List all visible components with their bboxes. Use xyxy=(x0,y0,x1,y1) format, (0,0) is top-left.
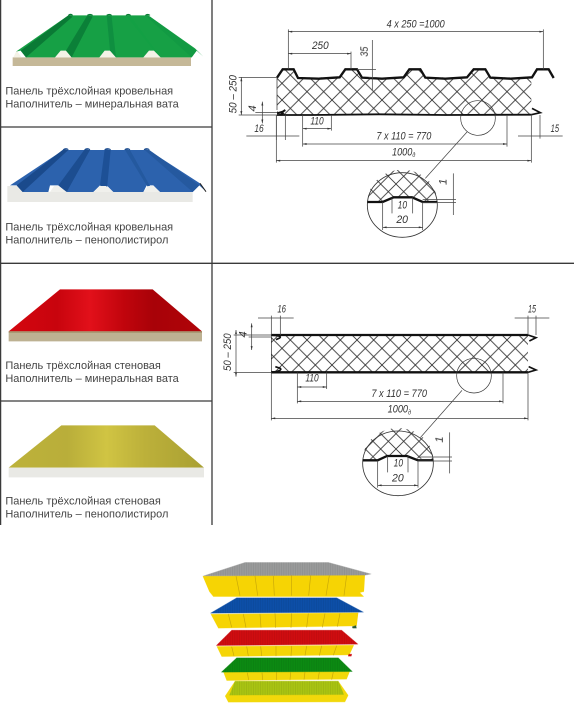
caption: red panel: Панель трёхслойная стеновая xyxy=(5,360,161,372)
stacked panel: lime xyxy=(225,681,348,702)
dimension: 1000 xyxy=(276,115,531,163)
image: blue roof panel xyxy=(7,149,206,202)
dimension: thickness 50-250 xyxy=(227,74,277,115)
stacked panel: red xyxy=(216,630,358,657)
dimension: pitch 250 xyxy=(288,40,351,69)
dimension: 110 xyxy=(303,115,331,147)
dimension: 110 xyxy=(297,372,327,403)
detail magnified view: 20 xyxy=(395,214,409,226)
stacked panel: grey top xyxy=(203,562,372,680)
detail callout circle xyxy=(420,358,491,438)
detail magnified view: 10 xyxy=(394,457,404,469)
dimension: overall 4 x 250: 4 x 250 =1000 xyxy=(387,18,445,30)
detail magnified view xyxy=(367,170,456,237)
dimension: 16 xyxy=(246,115,299,140)
caption: yellow panel: Панель трёхслойная стеновая xyxy=(5,496,161,508)
dimension: tongue 4 xyxy=(247,102,277,123)
caption: yellow panel: Наполнитель – пенополистирол xyxy=(5,509,168,521)
illustration: stack of coloured panels xyxy=(203,562,372,702)
dimension: 1000: 1000 xyxy=(392,146,417,158)
dimension: 110: 110 xyxy=(305,373,319,385)
image: green roof panel xyxy=(13,14,203,66)
insulation core xyxy=(277,69,531,115)
dimension: 16 xyxy=(258,304,294,335)
dimension: tongue 4: 4 xyxy=(247,105,259,112)
insulation core xyxy=(271,335,528,372)
image: red wall panel xyxy=(9,289,202,341)
panel: red wall panel, mineral wool xyxy=(5,289,202,385)
detail magnified view: 1 xyxy=(438,179,450,185)
dimension: thickness 50-250: 50 – 250 xyxy=(227,74,239,113)
panel: blue roof panel, polystyrene xyxy=(5,149,206,247)
dimension: tongue 4: 4 xyxy=(238,331,250,338)
dimension: 7 x 110: 7 x 110 = 770 xyxy=(376,131,432,143)
dimension: 15 xyxy=(515,304,549,335)
dimension: 16: 16 xyxy=(254,123,264,135)
dimension: thickness 50-250 xyxy=(222,330,271,377)
dimension: rib height 35 xyxy=(357,40,376,90)
caption: green panel: Панель трёхслойная кровельная xyxy=(5,86,173,98)
caption: blue panel: Наполнитель – пенополистирол xyxy=(5,235,168,247)
dimension: 1000: 1000 xyxy=(388,404,413,416)
panel: green roof panel, mineral wool xyxy=(5,14,203,111)
dimension: thickness 50-250: 50 – 250 xyxy=(222,333,234,371)
drawing: wall panel cross-section xyxy=(222,304,549,496)
metal skins xyxy=(271,335,528,372)
detail magnified view xyxy=(363,428,452,496)
dimension: overall 4 x 250 xyxy=(288,18,543,69)
caption: green panel: Наполнитель – минеральная вата xyxy=(5,99,180,111)
panel grid lines xyxy=(0,0,574,525)
image: yellow wall panel xyxy=(9,425,204,477)
stacked panel: green xyxy=(221,658,353,681)
detail magnified view: 20 xyxy=(391,473,404,485)
panel: yellow wall panel, polystyrene xyxy=(5,425,204,521)
dimension: 16: 16 xyxy=(277,304,286,316)
stacked panel: blue xyxy=(210,598,364,628)
detail callout circle xyxy=(425,101,495,178)
dimension: 15 xyxy=(518,115,563,139)
dimension: pitch 250: 250 xyxy=(311,40,329,52)
dimension: 1000: д xyxy=(412,151,416,159)
caption: red panel: Наполнитель – минеральная вата xyxy=(5,373,180,385)
dimension: 1000 xyxy=(271,372,528,420)
dimension: 110: 110 xyxy=(310,116,324,128)
dimension: 15: 15 xyxy=(551,123,559,135)
dimension: tongue 4 xyxy=(238,323,271,350)
dimension: 7 x 110: 7 x 110 = 770 xyxy=(371,388,428,400)
metal skins xyxy=(277,69,554,79)
drawing: roof panel cross-section xyxy=(227,18,563,237)
dimension: 1000: д xyxy=(408,408,411,416)
caption: blue panel: Панель трёхслойная кровельная xyxy=(5,222,173,234)
detail magnified view: 1 xyxy=(434,436,446,443)
dimension: 15: 15 xyxy=(528,304,536,316)
dimension: rib height 35: 35 xyxy=(359,46,371,57)
detail magnified view: 10 xyxy=(398,200,408,212)
